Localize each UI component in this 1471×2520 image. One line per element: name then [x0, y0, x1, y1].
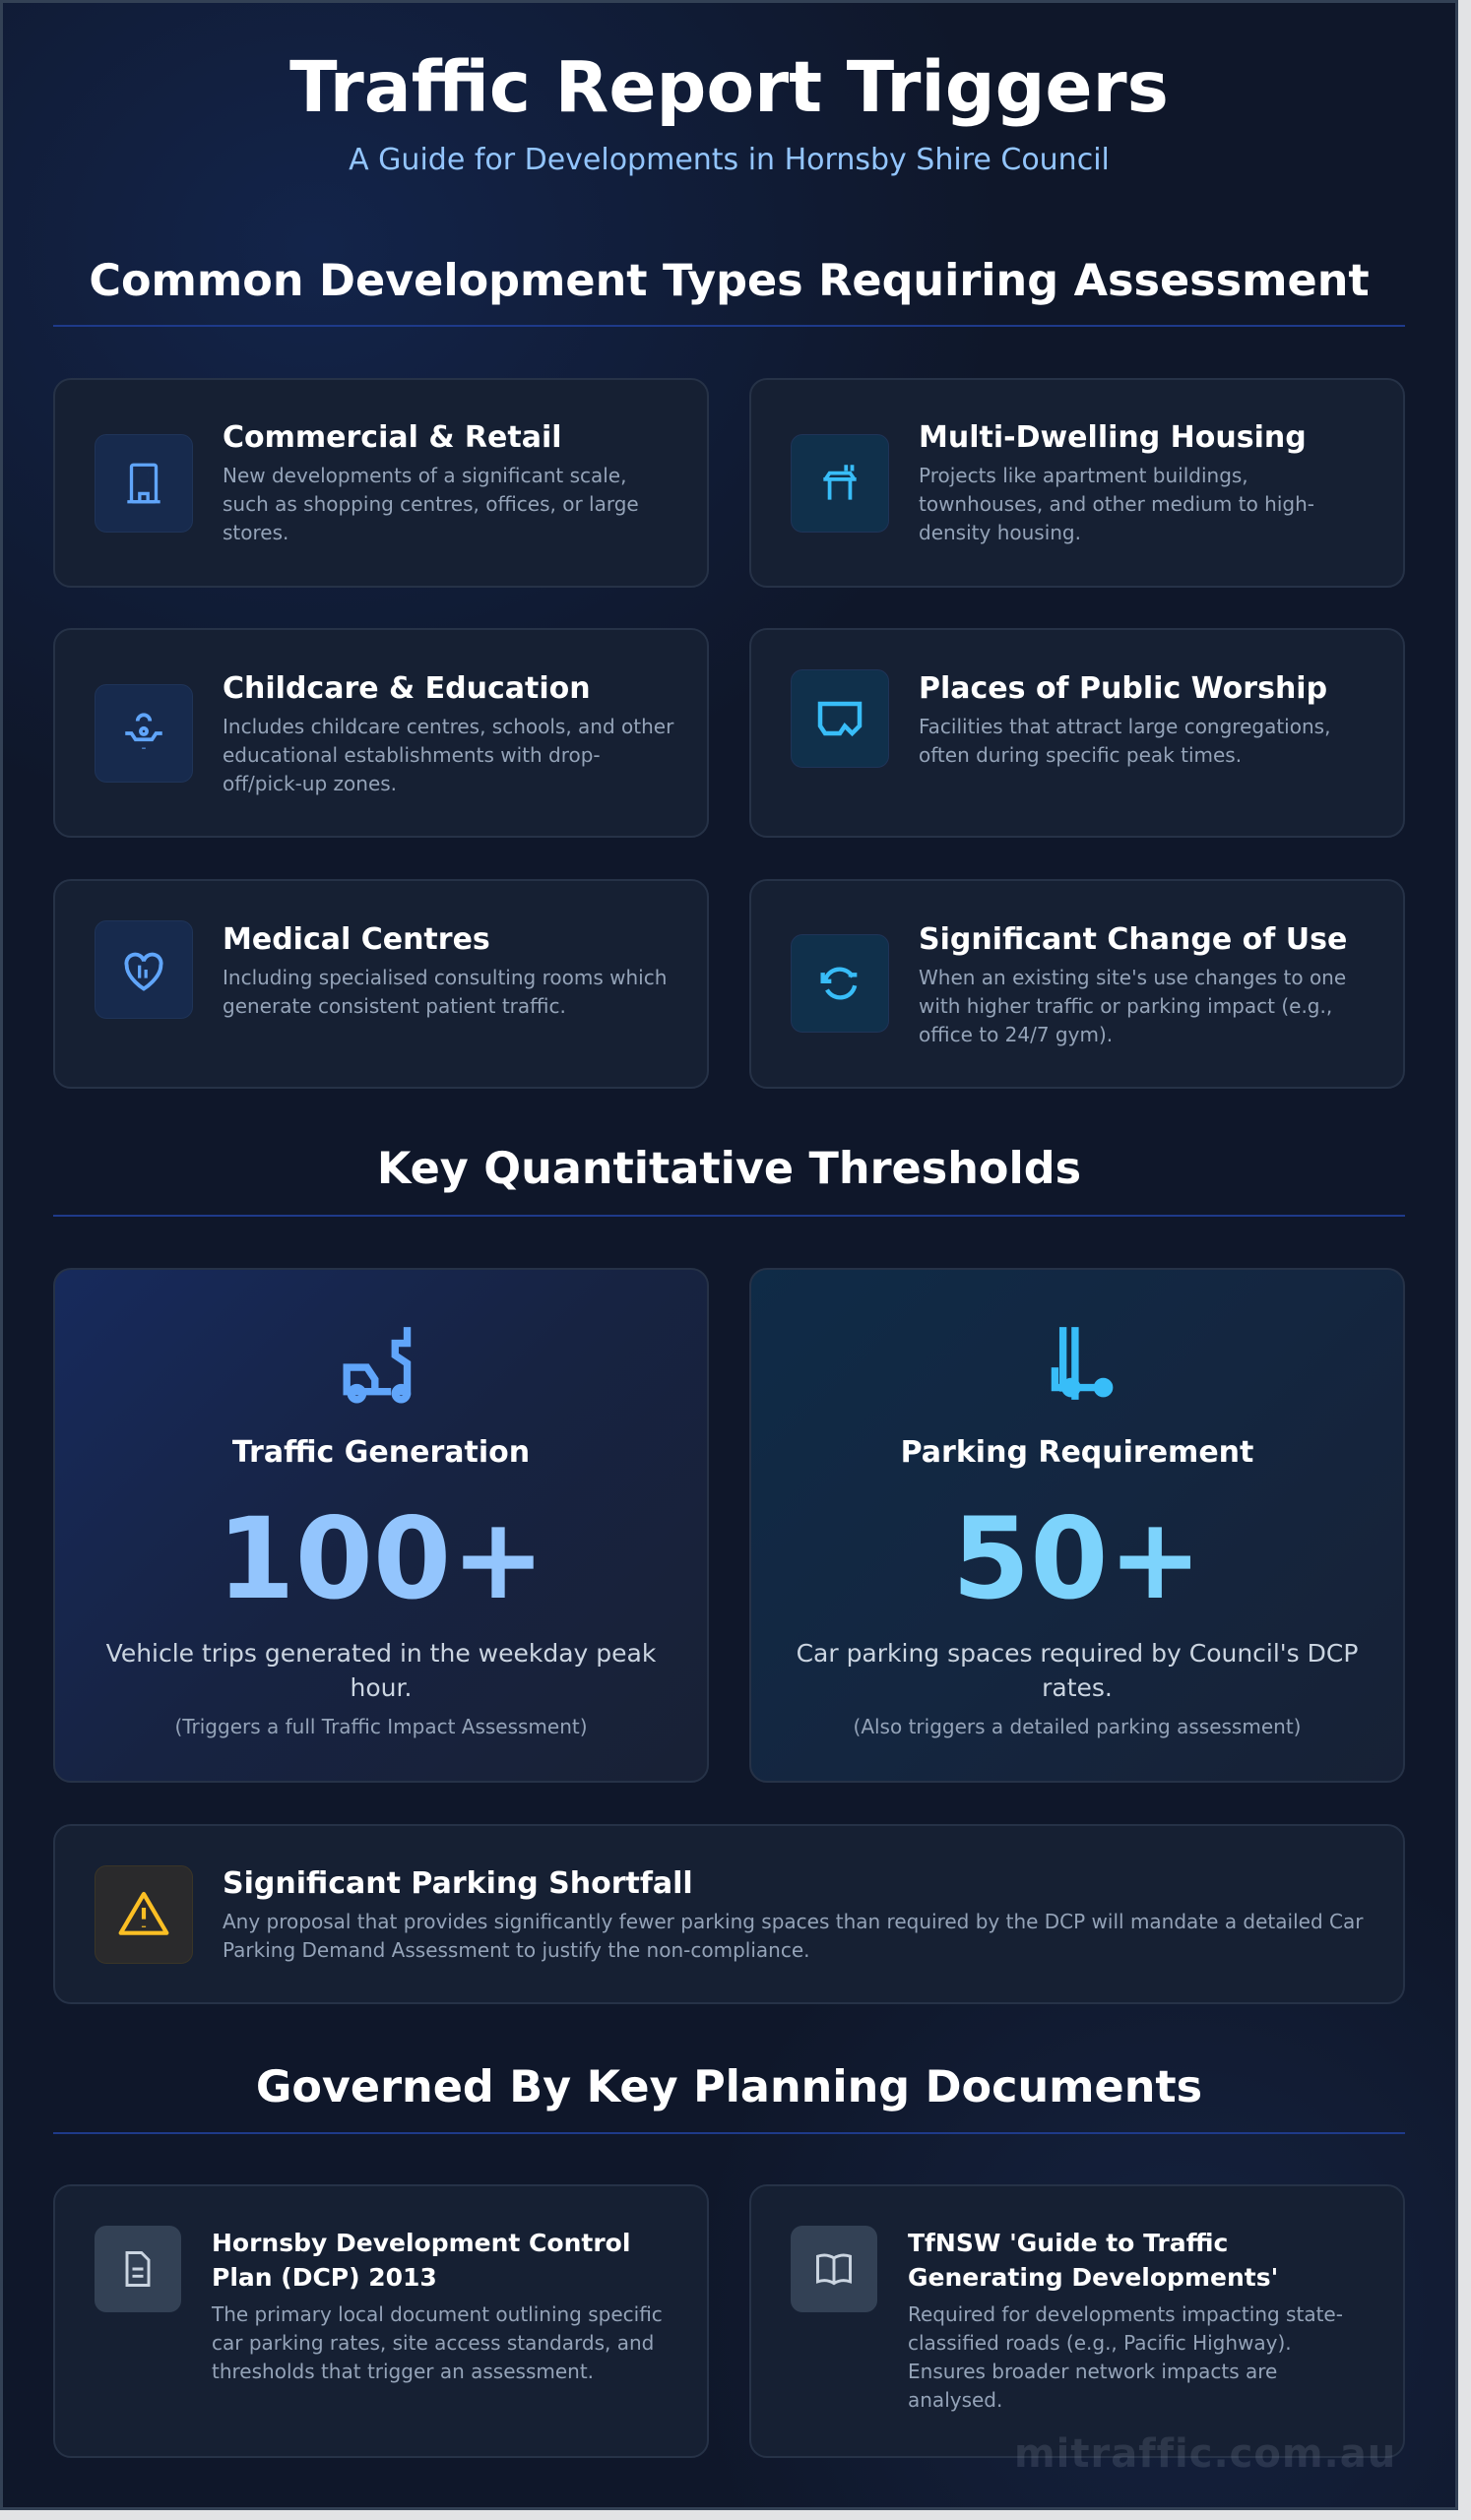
card: TfNSW guide: Ensures broader network impacts are: [908, 2360, 1277, 2383]
panel: parking requirement: (Also triggers a detailed parking assessment): [854, 1715, 1301, 1738]
icon: traffic: [343, 1327, 412, 1404]
card: TfNSW guide: Generating Developments': [908, 2263, 1278, 2292]
callout: parking shortfall: Any proposal that provides significantly fewer parking spaces than required by the DCP will mandate a detailed Car: [223, 1910, 1363, 1933]
panel: parking requirement: Car parking spaces required by Council's DCP rates.: [797, 1639, 1358, 1702]
icon: document: [95, 2226, 181, 2312]
icon: book: [791, 2226, 877, 2312]
card: change of use: office to 24/7 gym).: [919, 1023, 1113, 1046]
card: Hornsby DCP: Plan (DCP) 2013: [212, 2263, 437, 2292]
icon: parking: [1052, 1327, 1113, 1400]
card: multi-dwelling housing: [749, 378, 1405, 588]
panel: traffic generation: Vehicle trips generated in the weekday peak hour.: [106, 1639, 656, 1702]
icon: worship: [791, 669, 889, 768]
card: multi-dwelling housing: Projects like apartment buildings,: [919, 464, 1248, 487]
icon: childcare: [95, 684, 193, 783]
heading: planning documents: Governed By Key Planning Documents: [256, 2062, 1202, 2112]
card: change of use: Significant Change of Use: [919, 922, 1347, 957]
card: TfNSW guide: [749, 2184, 1405, 2458]
panel: traffic generation: [53, 1268, 709, 1783]
icon: warning: [95, 1864, 193, 1963]
card: commercial & retail: New developments of a significant scale,: [223, 464, 626, 487]
panel: traffic generation: Traffic Generation: [232, 1435, 530, 1470]
card: medical centres: [53, 879, 709, 1089]
card: childcare & education: educational establishments with drop-: [223, 743, 601, 767]
card: childcare & education: Childcare & Education: [223, 671, 591, 706]
card: multi-dwelling housing: townhouses, and other medium to high-: [919, 492, 1314, 516]
icon: building: [95, 433, 193, 532]
card: change of use: When an existing site's use changes to one: [919, 966, 1346, 989]
panel: traffic generation: (Triggers a full Traffic Impact Assessment): [174, 1715, 588, 1738]
panel: traffic generation: 100+: [217, 1493, 545, 1624]
card: Hornsby DCP: thresholds that trigger an assessment.: [212, 2360, 594, 2383]
title: Traffic Report Triggers: [289, 46, 1169, 128]
card: medical centres: Including specialised consulting rooms which: [223, 966, 667, 989]
card: TfNSW guide: TfNSW 'Guide to Traffic: [908, 2229, 1228, 2257]
card: Hornsby DCP: Hornsby Development Control: [212, 2229, 630, 2257]
panel: parking requirement: 50+: [952, 1493, 1202, 1624]
card: childcare & education: [53, 628, 709, 838]
callout: parking shortfall: Parking Demand Assessment to justify the non-compliance.: [223, 1937, 809, 1961]
callout: parking shortfall: [53, 1824, 1405, 2004]
card: commercial & retail: [53, 378, 709, 588]
card: change of use: [749, 879, 1405, 1089]
card: places of worship: Facilities that attract large congregations,: [919, 715, 1330, 738]
card: commercial & retail: stores.: [223, 521, 288, 544]
card: Hornsby DCP: The primary local document outlining specific: [212, 2302, 663, 2326]
subtitle: A Guide for Developments in Hornsby Shire Council: [349, 143, 1110, 177]
watermark: mitraffic.com.au: [1014, 2431, 1396, 2477]
card: multi-dwelling housing: Multi-Dwelling Housing: [919, 420, 1307, 455]
card: TfNSW guide: analysed.: [908, 2388, 1002, 2412]
card: TfNSW guide: Required for developments impacting state-: [908, 2302, 1343, 2326]
heading: thresholds: Key Quantitative Thresholds: [377, 1144, 1081, 1194]
callout: parking shortfall: Significant Parking Shortfall: [223, 1866, 693, 1900]
card: medical centres: Medical Centres: [223, 922, 490, 957]
card: commercial & retail: Commercial & Retail: [223, 420, 562, 455]
heading: development types: Common Development Types Requiring Assessment: [89, 256, 1370, 306]
card: medical centres: generate consistent patient traffic.: [223, 994, 566, 1018]
card: multi-dwelling housing: density housing.: [919, 521, 1081, 544]
icon: change arrows: [791, 934, 889, 1033]
card: places of worship: [749, 628, 1405, 838]
panel: parking requirement: [749, 1268, 1405, 1783]
card: places of worship: Places of Public Worship: [919, 671, 1327, 706]
card: change of use: with higher traffic or parking impact (e.g.,: [919, 994, 1332, 1018]
card: Hornsby DCP: car parking rates, site access standards, and: [212, 2331, 654, 2355]
card: TfNSW guide: classified roads (e.g., Pacific Highway).: [908, 2331, 1292, 2355]
icon: medical heart: [95, 920, 193, 1019]
icon: housing: [791, 433, 889, 532]
card: places of worship: often during specific peak times.: [919, 743, 1242, 767]
card: childcare & education: Includes childcare centres, schools, and other: [223, 715, 673, 738]
panel: parking requirement: Parking Requirement: [901, 1435, 1253, 1470]
card: commercial & retail: such as shopping centres, offices, or large: [223, 492, 639, 516]
card: Hornsby DCP: [53, 2184, 709, 2458]
card: childcare & education: off/pick-up zones.: [223, 772, 397, 795]
